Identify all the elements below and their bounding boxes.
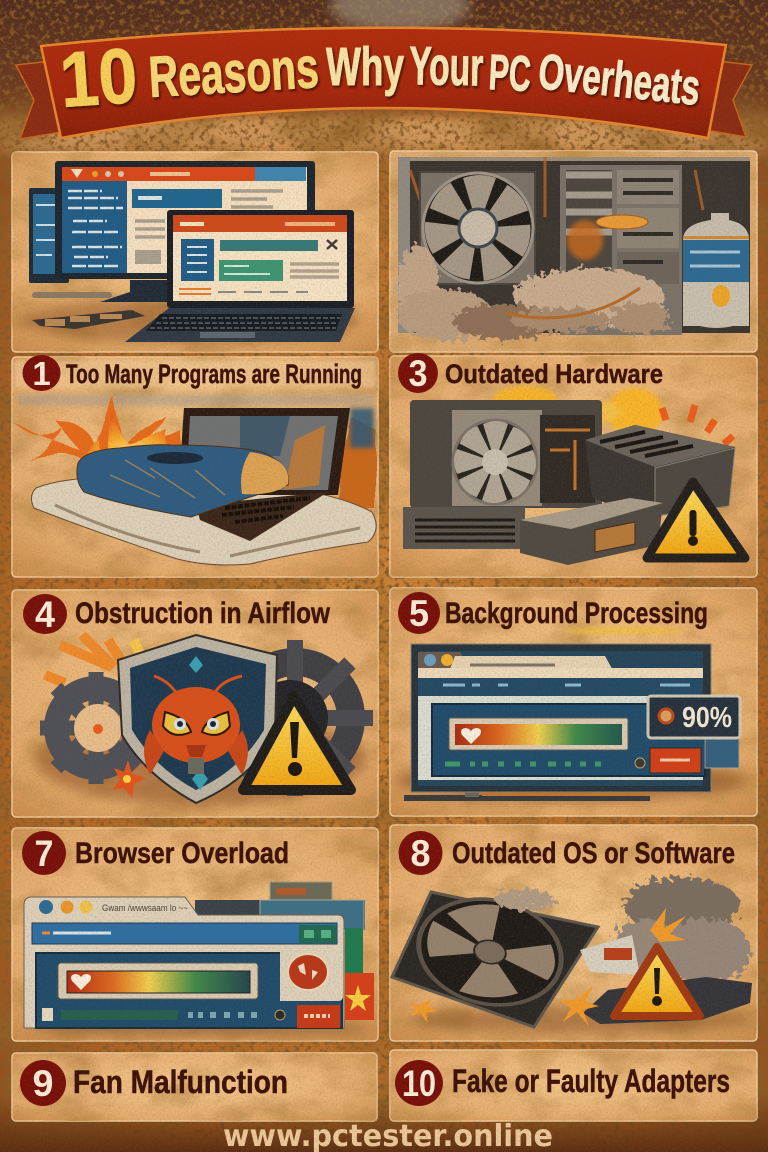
- banner right tail: [706, 60, 752, 137]
- icon: number badge 7: 7: [34, 833, 54, 874]
- icon: power supply: [520, 498, 663, 565]
- icon: server racks: [560, 165, 682, 335]
- icon: laptop under cushion: [178, 408, 350, 541]
- panel: 5 Background Processing: [390, 588, 757, 816]
- icon: dust on fan: [495, 890, 555, 910]
- icon: number badge 5: [398, 592, 440, 634]
- icon: number badge 5: 5: [409, 593, 429, 634]
- icon: number badge 10: 10: [402, 1063, 436, 1104]
- icon: left gear: [40, 672, 152, 784]
- icon: dust pile: [396, 245, 670, 341]
- panel: 10 Fake or Faulty Adapters: [390, 1050, 757, 1121]
- icon: browser window: [24, 897, 344, 1028]
- panel: dusty fan illustration: [390, 151, 757, 352]
- panel: 1 Too Many Programs: [12, 355, 378, 577]
- icon: number badge 8: [398, 831, 442, 875]
- icon: broken fan: [392, 886, 598, 1027]
- icon: main monitor: [32, 161, 315, 302]
- icon: sparks: [410, 908, 686, 1026]
- icon: number badge 1: [22, 355, 60, 392]
- icon: number badge 8: 8: [410, 833, 430, 874]
- icon: star tab: [345, 973, 374, 1020]
- icon: number badge 9: 9: [32, 1063, 54, 1104]
- icon: browser window: Gwam /wwwsaam lo ~~: [102, 903, 188, 913]
- icon: warning triangle: [647, 482, 745, 558]
- panel: monitors illustration: [12, 152, 378, 352]
- icon: canister: [683, 213, 749, 328]
- icon: number badge 1: 1: [32, 355, 51, 392]
- icon: number badge 3: [398, 353, 438, 394]
- icon: back monitor: [29, 188, 69, 283]
- heading 3: Outdated Hardware: [445, 359, 663, 389]
- icon: right gear: [217, 640, 373, 796]
- icon: smoke cloud: [613, 877, 751, 982]
- title text: 10: [57, 31, 140, 124]
- title banner: [16, 28, 752, 139]
- icon: low slot card: [403, 507, 525, 549]
- heading 1: Too Many Programs are Running: [66, 359, 362, 389]
- title text: Reasons: [147, 35, 320, 110]
- icon: red button: [650, 748, 701, 773]
- icon: back tabs: [195, 882, 365, 978]
- panel: 8 Outdated OS: [390, 825, 757, 1041]
- icon: number badge 4: 4: [35, 594, 55, 635]
- icon: white pillow: [31, 477, 376, 565]
- heading 9: Fan Malfunction: [73, 1064, 288, 1100]
- icon: 90 percent badge: [648, 696, 740, 738]
- panel: 7 Browser Overload: [12, 828, 378, 1041]
- title text: PC: [487, 44, 532, 102]
- icon: tower with fan: [410, 400, 602, 508]
- icon: case fan: [420, 172, 535, 284]
- title text: [57, 31, 703, 124]
- banner left tail: [16, 60, 62, 139]
- icon: blue cushion: [77, 445, 288, 517]
- icon: laptop: [125, 210, 355, 342]
- icon: number badge 7: [22, 831, 66, 875]
- icon: burst rays: [45, 635, 142, 683]
- panel: 9 Fan Malfunction: [12, 1053, 377, 1121]
- icon: number badge 9: [20, 1060, 66, 1106]
- icon: dark device: [580, 935, 752, 1024]
- icon: flames: [16, 395, 376, 510]
- icon: metal box: [585, 425, 735, 517]
- title text: Your: [409, 36, 484, 97]
- icon: side blue tab: [705, 738, 739, 768]
- icon: shield with bug: [118, 635, 277, 803]
- icon: chips: [32, 310, 145, 329]
- icon: warning triangle: [614, 947, 700, 1016]
- title text: Why: [326, 37, 404, 97]
- heading 4: Obstruction in Airflow: [75, 597, 331, 630]
- icon: number badge 3: 3: [408, 353, 428, 394]
- icon: heat glow and sparks: [493, 386, 733, 444]
- icon: browser monitor: [411, 644, 711, 792]
- icon: monitor stand: [404, 791, 650, 801]
- icon: 90 percent badge: 90%: [682, 702, 732, 734]
- panel: 4 Obstruction in Airflow: [12, 590, 378, 817]
- banner ribbon: [41, 28, 726, 138]
- heading 7: Browser Overload: [75, 837, 289, 870]
- icon: warning triangle: [243, 696, 351, 790]
- icon: number badge 4: [23, 594, 67, 635]
- icon: spark: [112, 760, 146, 798]
- panel: 3 Outdated Hardware: [390, 353, 757, 577]
